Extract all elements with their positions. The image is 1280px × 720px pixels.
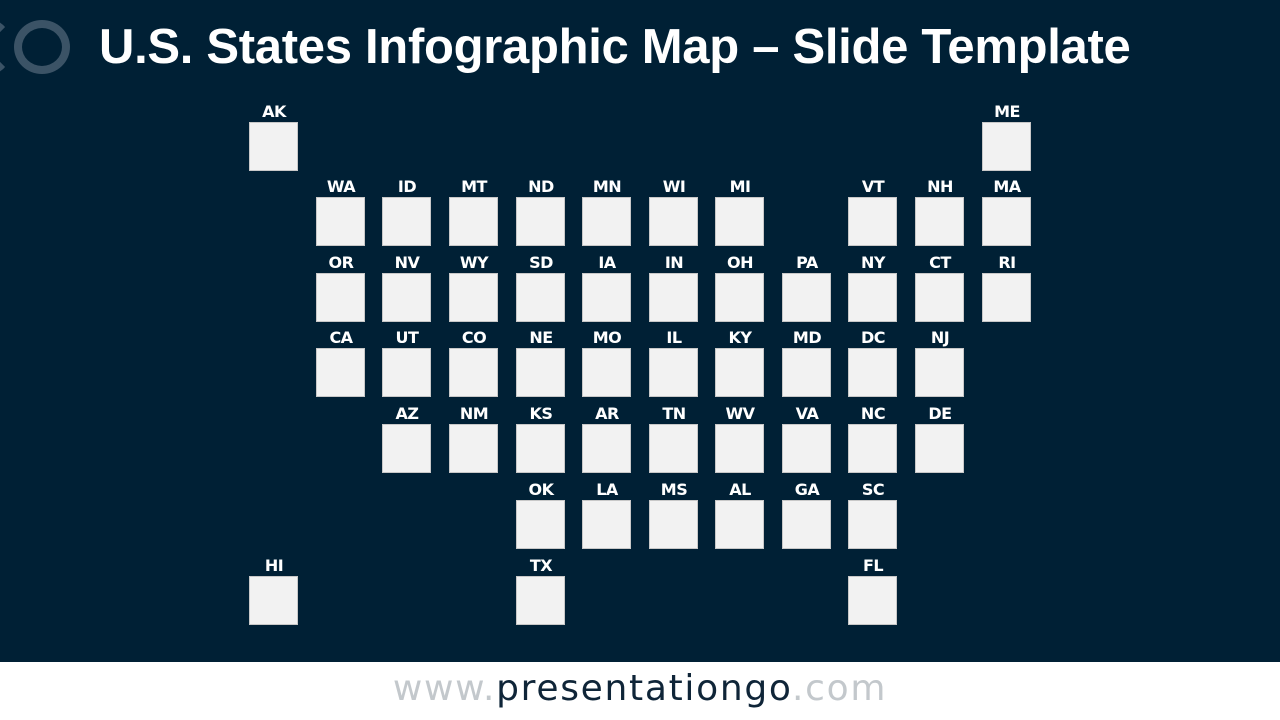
state MD	[782, 328, 831, 397]
state AZ	[382, 404, 431, 473]
state MN: MN	[593, 177, 621, 196]
state AR	[582, 404, 631, 473]
state NJ: NJ	[931, 328, 949, 347]
state ID	[382, 177, 431, 246]
state IA: IA	[598, 253, 616, 272]
state MA	[982, 177, 1031, 246]
state VA	[782, 400, 832, 474]
state WV: WV	[725, 404, 755, 423]
state LA	[582, 476, 632, 550]
state AL	[715, 476, 765, 550]
state DE: DE	[928, 404, 952, 423]
state OR	[316, 253, 365, 322]
state WI	[649, 177, 698, 246]
state CA	[316, 328, 365, 397]
state CA: CA	[329, 328, 353, 347]
state TX: TX	[530, 556, 552, 575]
state DC: DC	[861, 328, 885, 347]
state WA: WA	[327, 177, 355, 196]
state AK	[249, 102, 298, 171]
state NC: NC	[861, 404, 885, 423]
state HI: HI	[265, 556, 283, 575]
state RI: RI	[998, 253, 1016, 272]
state MO	[582, 328, 631, 397]
state CT: CT	[929, 253, 951, 272]
state IL	[649, 328, 698, 397]
state UT: UT	[396, 328, 418, 347]
state TN: TN	[662, 404, 686, 423]
state FL	[848, 552, 898, 626]
state KS: KS	[530, 404, 552, 423]
state AR: AR	[595, 404, 619, 423]
state ME: ME	[994, 102, 1020, 121]
state PA	[782, 253, 831, 322]
state NC	[848, 400, 898, 474]
state NM: NM	[460, 404, 488, 423]
state VT	[848, 177, 897, 246]
state PA: PA	[796, 253, 818, 272]
state AL: AL	[729, 480, 751, 499]
state SD: SD	[529, 253, 553, 272]
state NE	[516, 328, 565, 397]
state MO: MO	[593, 328, 621, 347]
logo fragment	[0, 20, 70, 74]
state WA	[316, 177, 365, 246]
state FL: FL	[863, 556, 883, 575]
state WV	[715, 400, 765, 474]
state SC	[848, 476, 898, 550]
state MA: MA	[993, 177, 1021, 196]
state UT	[382, 328, 431, 397]
state NM	[449, 404, 498, 473]
state OH: OH	[727, 253, 753, 272]
state SD	[516, 253, 565, 322]
state WY	[449, 253, 498, 322]
state NY: NY	[861, 253, 885, 272]
state ME	[982, 102, 1031, 171]
state OH	[715, 253, 764, 322]
state MN	[582, 177, 631, 246]
footer url: www.presentationgo.com	[393, 668, 887, 709]
state MS	[649, 476, 699, 550]
state NE: NE	[529, 328, 553, 347]
state TX	[516, 552, 566, 626]
state CO: CO	[462, 328, 486, 347]
state VA: VA	[796, 404, 818, 423]
state MT	[449, 177, 498, 246]
state VT: VT	[862, 177, 884, 196]
state NV: NV	[395, 253, 419, 272]
state NH: NH	[927, 177, 953, 196]
state KS	[516, 404, 565, 473]
state GA	[782, 476, 832, 550]
state ND: ND	[528, 177, 554, 196]
state OK: OK	[528, 480, 554, 499]
state NJ	[915, 328, 964, 397]
state WY: WY	[460, 253, 488, 272]
state AZ: AZ	[396, 404, 418, 423]
state IA	[582, 253, 631, 322]
state MS: MS	[661, 480, 687, 499]
state KY: KY	[728, 328, 751, 347]
state DC	[848, 328, 897, 397]
state IN: IN	[665, 253, 683, 272]
state MI: MI	[730, 177, 750, 196]
state DE	[915, 400, 965, 474]
state RI	[982, 253, 1031, 322]
state CT	[915, 253, 964, 322]
state WI: WI	[663, 177, 685, 196]
state KY	[715, 328, 764, 397]
state MD: MD	[793, 328, 821, 347]
state IL: IL	[666, 328, 682, 347]
state OR: OR	[329, 253, 353, 272]
state IN	[649, 253, 698, 322]
state OK	[516, 476, 566, 550]
state GA: GA	[795, 480, 819, 499]
state MT: MT	[461, 177, 487, 196]
state ID: ID	[398, 177, 416, 196]
state AK: AK	[262, 102, 286, 121]
state SC: SC	[862, 480, 884, 499]
title: U.S. States Infographic Map – Slide Template	[99, 20, 1130, 74]
state NH	[915, 177, 964, 246]
state HI	[249, 552, 299, 626]
map grid	[249, 102, 1031, 625]
state ND	[516, 177, 565, 246]
state NV	[382, 253, 431, 322]
footer	[0, 662, 1280, 720]
state CO	[449, 328, 498, 397]
state MI	[715, 177, 764, 246]
state LA: LA	[596, 480, 618, 499]
state NY	[848, 253, 897, 322]
state TN	[649, 404, 698, 473]
